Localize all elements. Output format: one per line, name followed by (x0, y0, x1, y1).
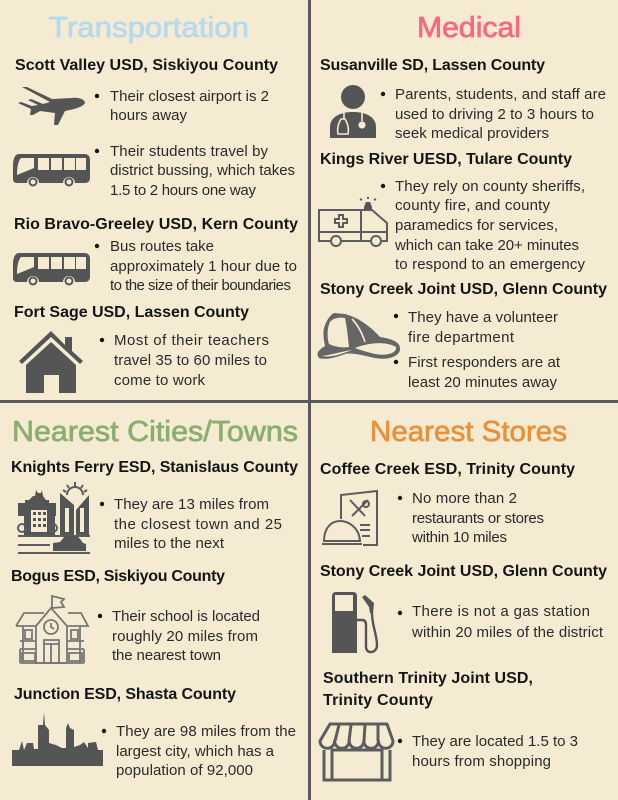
bullet text: shopping: They are located 1.5 to 3 (412, 733, 578, 750)
bullet text: 13 miles: They are 13 miles from (114, 496, 269, 513)
bullet text: fire department: They have a volunteer (408, 309, 558, 326)
district: Susanville: Susanville SD, Lassen County (320, 57, 545, 74)
icon: city skyline (12, 712, 103, 766)
bullet text: 98 miles: They are 98 miles from the (116, 723, 296, 740)
district: Bogus: Bogus ESD, Siskiyou County (11, 568, 225, 585)
panel: medical (318, 12, 607, 391)
heading: Nearest Cities/Towns: Nearest Cities/Towns (12, 416, 298, 448)
district: Southern Trinity: Southern Trinity Joint USD, (323, 670, 533, 687)
bullet text: teachers: come to work (114, 372, 206, 389)
heading: Medical: Medical (417, 12, 521, 44)
icon: house (19, 331, 83, 393)
bullet text: 13 miles (100, 496, 282, 552)
panel: transportation (13, 12, 298, 393)
bullet text: teachers: travel 35 to 60 miles to (114, 352, 267, 369)
bullet text: services: county fire, and county (395, 197, 550, 214)
bullet text: school (98, 608, 260, 664)
bullet text: fire department: least 20 minutes away (408, 374, 558, 391)
bullet text: bus routes: Bus routes take (110, 238, 214, 255)
district: Junction: Junction ESD, Shasta County (14, 686, 236, 703)
bullet text: bus routes (95, 238, 297, 294)
district: Stony Creek: Stony Creek Joint USD, Glenn County (320, 563, 607, 580)
icon: city with car (18, 482, 90, 553)
bullet text: fire department (394, 309, 561, 391)
bullet text: airport: Their closest airport is 2 (110, 88, 269, 105)
bullet text: airport: hours away (110, 107, 188, 124)
icon: gas pump (332, 592, 377, 653)
icon: storefront (320, 724, 393, 780)
bullet text: bus routes: approximately 1 hour due to (110, 258, 297, 275)
bullet text: drive: used to driving 2 to 3 hours to (395, 106, 594, 123)
bullet text: bussing: 1.5 to 2 hours one way (110, 182, 256, 199)
icon: doctor (330, 85, 376, 138)
panel: nearest stores (320, 416, 607, 780)
bullet text: school: roughly 20 miles from (112, 628, 258, 645)
panel: nearest cities/towns (11, 416, 298, 779)
bullet text: bussing (95, 143, 295, 199)
district: Stony Creek: Stony Creek Joint USD, Glenn County (320, 281, 607, 298)
bullet text: services: They rely on county sheriffs, (395, 178, 585, 195)
bullet text: teachers: Most of their teachers (114, 332, 269, 349)
icon: fire helmet (318, 313, 400, 359)
bullet text: 13 miles: the closest town and 25 (114, 516, 282, 533)
district: Rio Bravo-Greeley: Rio Bravo-Greeley USD, Kern County (14, 216, 298, 233)
bullet text: restaurants (398, 490, 544, 546)
bullet text: services (381, 178, 586, 273)
bullet text: bus routes: to the size of their boundaries (110, 277, 291, 294)
bullet text: services: to respond to an emergency (395, 256, 586, 273)
bullet text: restaurants: within 10 miles (411, 529, 507, 546)
icon: ambulance (319, 197, 387, 246)
bullet text: drive: seek medical providers (395, 125, 549, 142)
bullet text: fire department: fire department (408, 329, 515, 346)
bullet text: gas station (398, 603, 604, 641)
heading: Nearest Stores: Nearest Stores (370, 416, 567, 448)
bullet text: gas station: within 20 miles of the district (411, 624, 604, 641)
bullet text: 98 miles (102, 723, 296, 779)
bullet text: gas station: There is not a gas station (412, 603, 590, 620)
bullet text: restaurants: restaurants or stores (412, 510, 544, 527)
bullet text: airport (95, 88, 269, 124)
bullet text: shopping: hours from shopping (412, 753, 551, 770)
icon: airplane (18, 87, 85, 125)
bullet text: shopping (398, 733, 578, 770)
heading: Transportation: Transportation (49, 12, 249, 44)
district: Southern Trinity: Trinity County (323, 692, 433, 709)
icon: menu and cloche (322, 491, 377, 545)
district: Southern Trinity (323, 670, 533, 709)
bullet text: fire department: First responders are at (408, 354, 561, 371)
district: Knights Ferry: Knights Ferry ESD, Stanislaus County (11, 459, 298, 476)
district: Coffee Creek: Coffee Creek ESD, Trinity County (320, 461, 575, 478)
district: Fort Sage: Fort Sage USD, Lassen County (14, 304, 249, 321)
district: Scott Valley: Scott Valley USD, Siskiyou County (15, 57, 278, 74)
bullet text: drive: Parents, students, and staff are (395, 86, 606, 103)
bullet text: services: which can take 20+ minutes (394, 237, 579, 254)
bullet text: 98 miles: population of 92,000 (116, 762, 253, 779)
bullet text: drive (381, 86, 606, 142)
icon: school building (16, 596, 88, 663)
bullet text: bussing: district bussing, which takes (110, 162, 295, 179)
bullet text: restaurants: No more than 2 (412, 490, 517, 507)
bullet text: 13 miles: miles to the next (114, 535, 225, 552)
icon: bus (13, 253, 90, 284)
bullet text: bussing: Their students travel by (110, 143, 268, 160)
bullet text: school: the nearest town (112, 647, 221, 664)
icon: bus (13, 154, 90, 186)
bullet text: teachers (100, 332, 269, 389)
bullet text: school: Their school is located (112, 608, 260, 625)
district: Kings River: Kings River UESD, Tulare County (320, 151, 572, 168)
bullet text: 98 miles: largest city, which has a (116, 743, 275, 760)
bullet text: services: paramedics for services, (395, 217, 558, 234)
